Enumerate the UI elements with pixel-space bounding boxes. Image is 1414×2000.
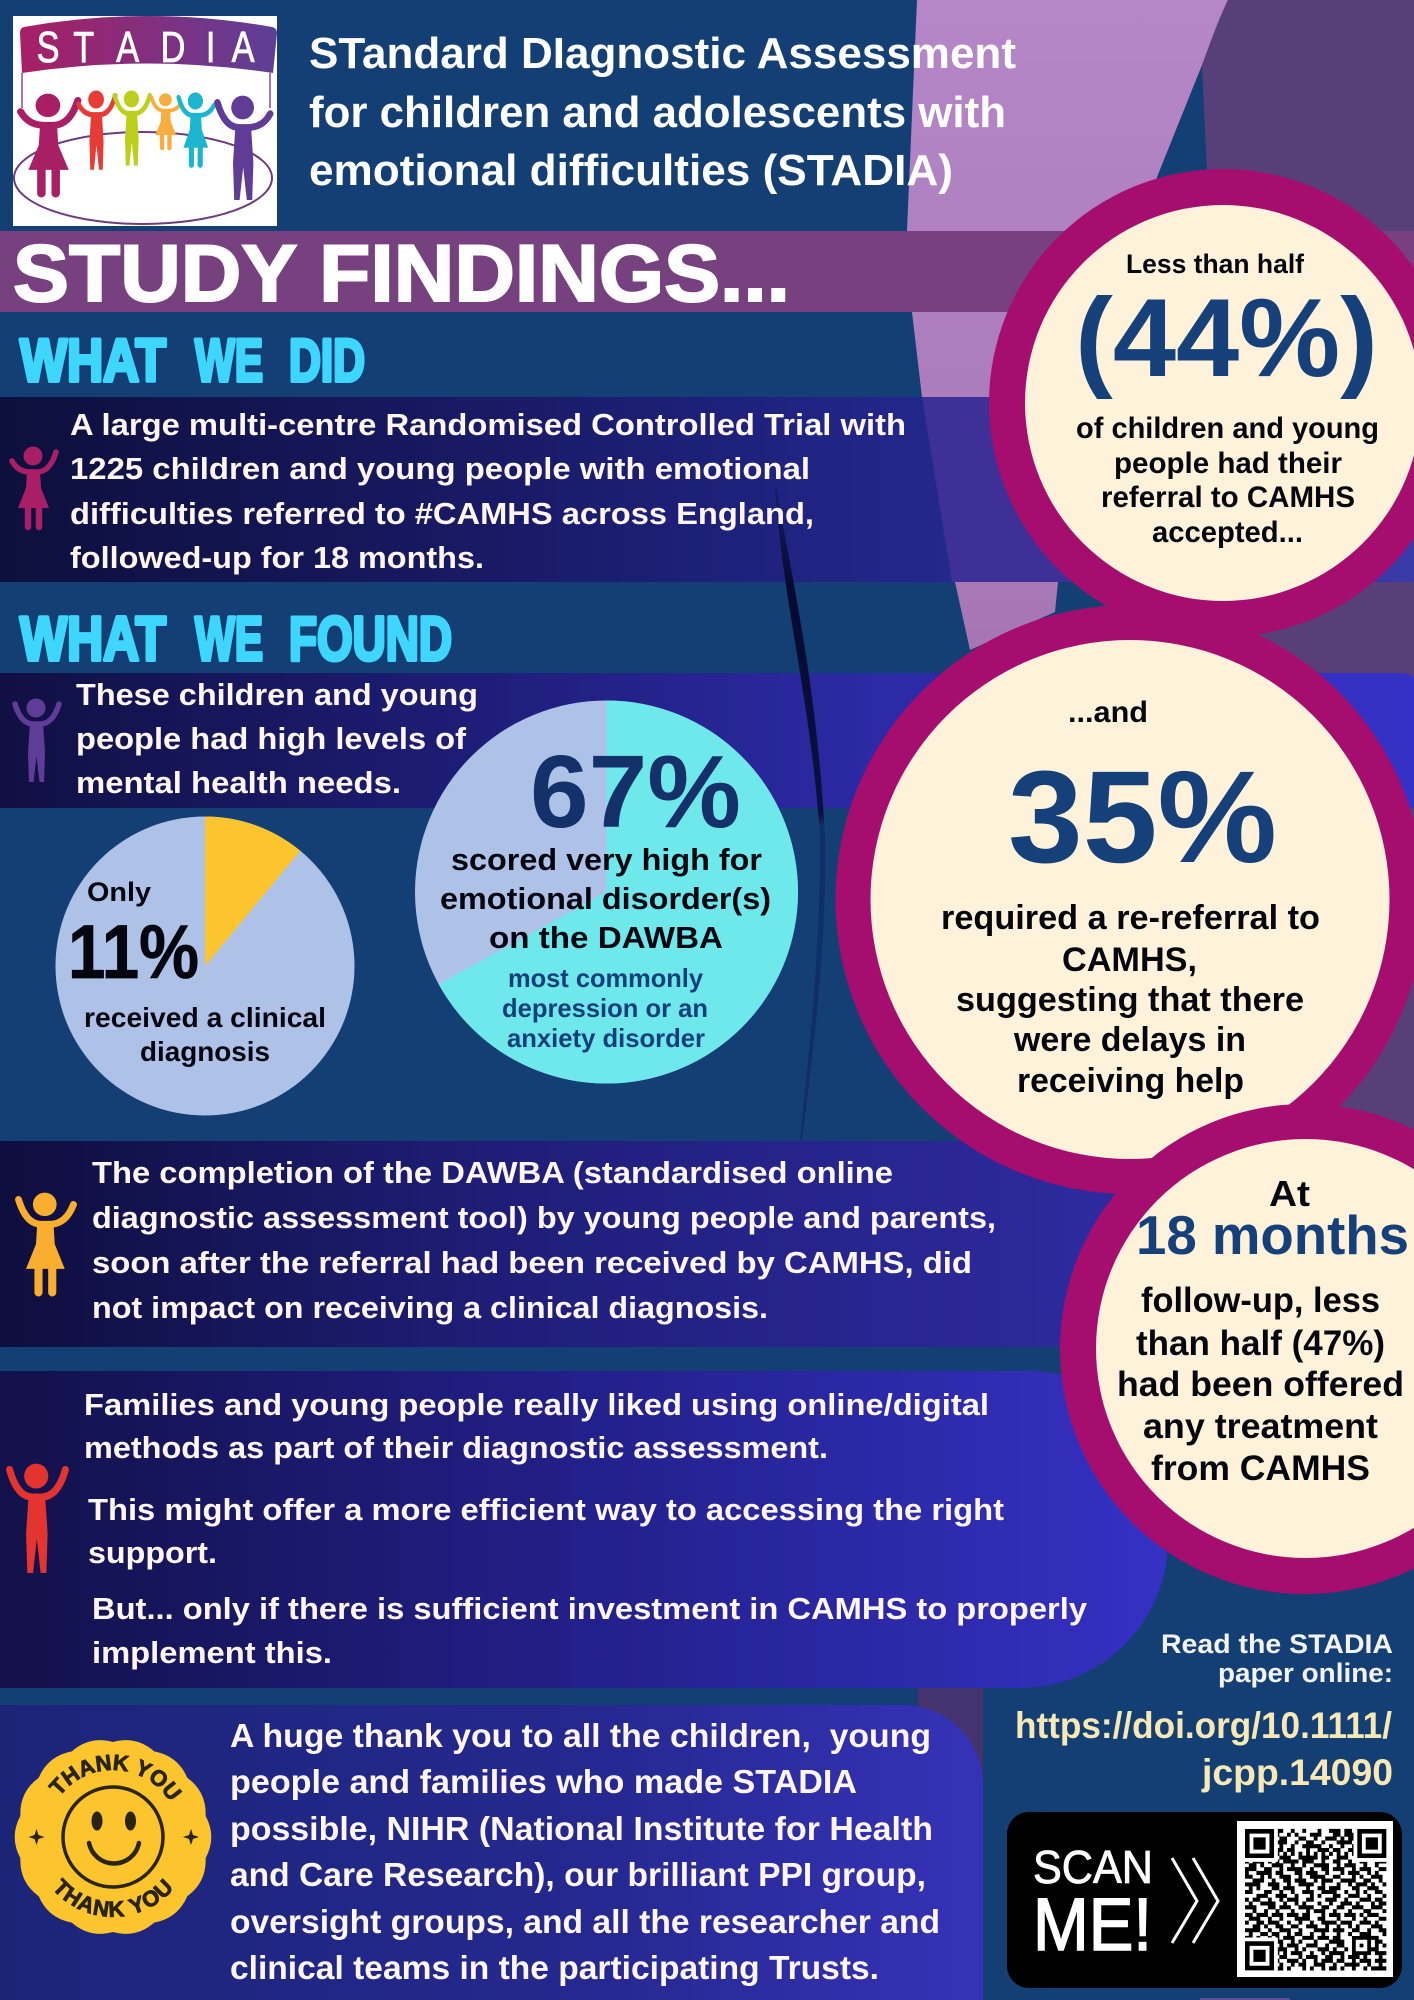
pie chart: 67% emotional disorder: emotional disorder(s)	[440, 881, 771, 916]
panel: what we found band	[0, 673, 1414, 808]
callout circle: 44%: accepted...	[1152, 516, 1303, 549]
title: for children and adolescents with	[309, 88, 1006, 137]
text block: what we did: 1225 children and young people with emotional	[70, 451, 810, 486]
decorative bottom stripe	[1200, 1998, 1290, 2000]
pie chart: 67% emotional disorder: scored very high for	[451, 842, 762, 877]
logo: STADIA	[13, 16, 277, 226]
text block: online methods: methods as part of their diagnostic assessment.	[84, 1430, 828, 1465]
text block: online methods: But... only if there is sufficient investment in CAMHS to properly	[92, 1591, 1088, 1626]
callout circle: 44%: referral to CAMHS	[1101, 481, 1355, 514]
QR code	[1237, 1821, 1393, 1977]
callout circle: 18 months: than half (47%)	[1136, 1324, 1385, 1363]
callout circle: 35%: receiving help	[1017, 1062, 1244, 1100]
callout circle: 18 months: any treatment	[1143, 1407, 1378, 1446]
icon: orange child	[18, 1193, 74, 1292]
pie chart: 67% emotional disorder: most commonly	[508, 963, 704, 993]
text block: DAWBA completion: soon after the referral had been received by CAMHS, did	[92, 1245, 972, 1280]
heading: what we found	[20, 605, 452, 674]
QR callout: scan me	[1007, 1812, 1402, 1988]
text block: high levels of need: These children and young	[76, 677, 478, 712]
logo person: red	[79, 90, 115, 170]
text block: high levels of need	[76, 677, 478, 800]
logo person: cyan	[179, 92, 214, 165]
icon: purple child	[15, 698, 59, 782]
callout circle: 35%	[836, 605, 1414, 1194]
icon: red child	[10, 1464, 65, 1573]
heading: what we found: WE	[195, 605, 263, 674]
panel: what we did band	[0, 397, 1414, 582]
text block: online methods: support.	[88, 1535, 217, 1570]
logo person: orange	[151, 93, 181, 148]
text block: thank you: A huge thank you to all the children, young	[230, 1717, 931, 1754]
curved dark line	[775, 486, 825, 1140]
text block: what we did: difficulties referred to #CAMHS across England,	[70, 496, 814, 531]
pie chart: 11% clinical diagnosis	[56, 816, 354, 1116]
callout circle: 35%: 35%	[1008, 743, 1277, 890]
heading: what we found: WHAT	[20, 605, 166, 674]
text block: read the paper: jcpp.14090	[1201, 1752, 1393, 1793]
text block: thank you: and Care Research), our brilliant PPI group,	[230, 1856, 926, 1893]
text block: what we did: followed-up for 18 months.	[70, 540, 484, 575]
text block: DAWBA completion: not impact on receiving a clinical diagnosis.	[92, 1290, 768, 1325]
logo banner	[20, 16, 277, 73]
callout circle: 35%: required a re-referral to	[941, 899, 1320, 937]
callout circle: 35%: were delays in	[1013, 1021, 1246, 1059]
heading: what we did	[20, 327, 365, 394]
pie chart: 67% emotional disorder: depression or an	[502, 993, 708, 1023]
decorative purple shape	[1200, 0, 1414, 1130]
pie chart: 67% emotional disorder: anxiety disorder	[507, 1023, 705, 1053]
callout circle: 44%: Less than half	[1126, 249, 1305, 279]
QR callout: scan me: SCAN	[1033, 1841, 1153, 1893]
icon: thank you smiley badge	[14, 1740, 212, 1934]
callout circle: 35%: ...and	[1068, 696, 1148, 729]
text block: read the paper: https://doi.org/10.1111/	[1015, 1705, 1392, 1746]
icon: thank you smiley badge: THANK YOU	[48, 1754, 182, 1800]
panel: study findings band	[0, 231, 1414, 312]
logo person: purple	[217, 96, 270, 200]
heading: what we did: WE	[195, 327, 263, 394]
logo wordmark: STADIA	[37, 23, 255, 72]
lilac overlay in what we did band	[922, 397, 1100, 582]
text block: thank you: possible, NIHR (National Institute for Health	[230, 1810, 933, 1847]
panel: thank you band	[0, 1705, 983, 2000]
heading: what we did: WHAT	[20, 327, 166, 394]
text block: read the paper	[1015, 1629, 1393, 1793]
callout circle: 18 months: from CAMHS	[1151, 1449, 1370, 1488]
title: emotional difficulties (STADIA)	[309, 146, 953, 195]
callout circle: 18 months: At	[1269, 1173, 1310, 1214]
icon: thank you smiley badge: THANK YOU	[54, 1877, 172, 1918]
text block: online methods: implement this.	[92, 1635, 332, 1670]
decorative dark patch	[918, 1685, 983, 1805]
pie chart: 67% emotional disorder	[415, 700, 798, 1084]
icon: chevrons	[1172, 1858, 1218, 1943]
callout circle: 35%: CAMHS,	[1062, 941, 1197, 979]
pie chart: 11% clinical diagnosis: received a clinical	[84, 1002, 326, 1033]
callout circle: 44%: of children and young	[1076, 412, 1379, 445]
logo person: magenta	[21, 94, 78, 193]
heading: what we found: FOUND	[289, 605, 452, 674]
callout circle: 44%	[989, 169, 1414, 637]
callout circle: 18 months: 18 months	[1136, 1204, 1409, 1266]
callout circle: 35%: suggesting that there	[956, 981, 1304, 1019]
title	[309, 29, 1016, 195]
pie chart: 67% emotional disorder: on the DAWBA	[489, 920, 723, 955]
callout circle: 44%: (44%)	[1075, 276, 1378, 400]
callout circle: 18 months	[1060, 1104, 1414, 1594]
text block: high levels of need: mental health needs.	[76, 765, 401, 800]
heading: study findings: STUDY FINDINGS...	[13, 229, 790, 319]
text block: read the paper: Read the STADIA	[1161, 1629, 1393, 1659]
callout circle: 18 months: had been offered	[1117, 1365, 1404, 1404]
text block: DAWBA completion	[92, 1155, 996, 1325]
heading: what we did: DID	[289, 327, 365, 394]
text block: DAWBA completion: diagnostic assessment tool) by young people and parents,	[92, 1200, 996, 1235]
text block: online methods: This might offer a more efficient way to accessing the right	[88, 1492, 1004, 1527]
callout circle: 18 months: follow-up, less	[1141, 1281, 1380, 1320]
text block: online methods: Families and young people really liked using online/digital	[84, 1387, 989, 1422]
QR callout: scan me: ME!	[1033, 1883, 1152, 1966]
text block: thank you: clinical teams in the participating Trusts.	[230, 1949, 879, 1986]
text block: what we did	[70, 407, 906, 575]
panel: online methods band	[0, 1371, 1168, 1688]
text block: high levels of need: people had high levels of	[76, 721, 467, 756]
pie chart: 11% clinical diagnosis: diagnosis	[140, 1036, 270, 1067]
icon: magenta child	[12, 446, 56, 527]
logo person: green	[115, 90, 150, 166]
text block: read the paper: paper online:	[1218, 1658, 1393, 1688]
text block: thank you: people and families who made STADIA	[230, 1763, 857, 1800]
text block: thank you	[230, 1717, 940, 1986]
text block: what we did: A large multi-centre Randomised Controlled Trial with	[70, 407, 906, 442]
text block: online methods	[84, 1387, 1088, 1670]
text block: thank you: oversight groups, and all the researcher and	[230, 1903, 940, 1940]
decorative lilac shape	[907, 0, 1228, 650]
callout circle: 44%: people had their	[1114, 447, 1342, 480]
pie chart: 11% clinical diagnosis: Only	[87, 877, 151, 907]
text block: DAWBA completion: The completion of the DAWBA (standardised online	[92, 1155, 893, 1190]
pie chart: 11% clinical diagnosis: 11%	[68, 910, 199, 995]
panel: DAWBA band	[0, 1141, 1250, 1347]
pie chart: 67% emotional disorder: 67%	[530, 734, 741, 849]
title: STandard DIagnostic Assessment	[309, 29, 1016, 78]
